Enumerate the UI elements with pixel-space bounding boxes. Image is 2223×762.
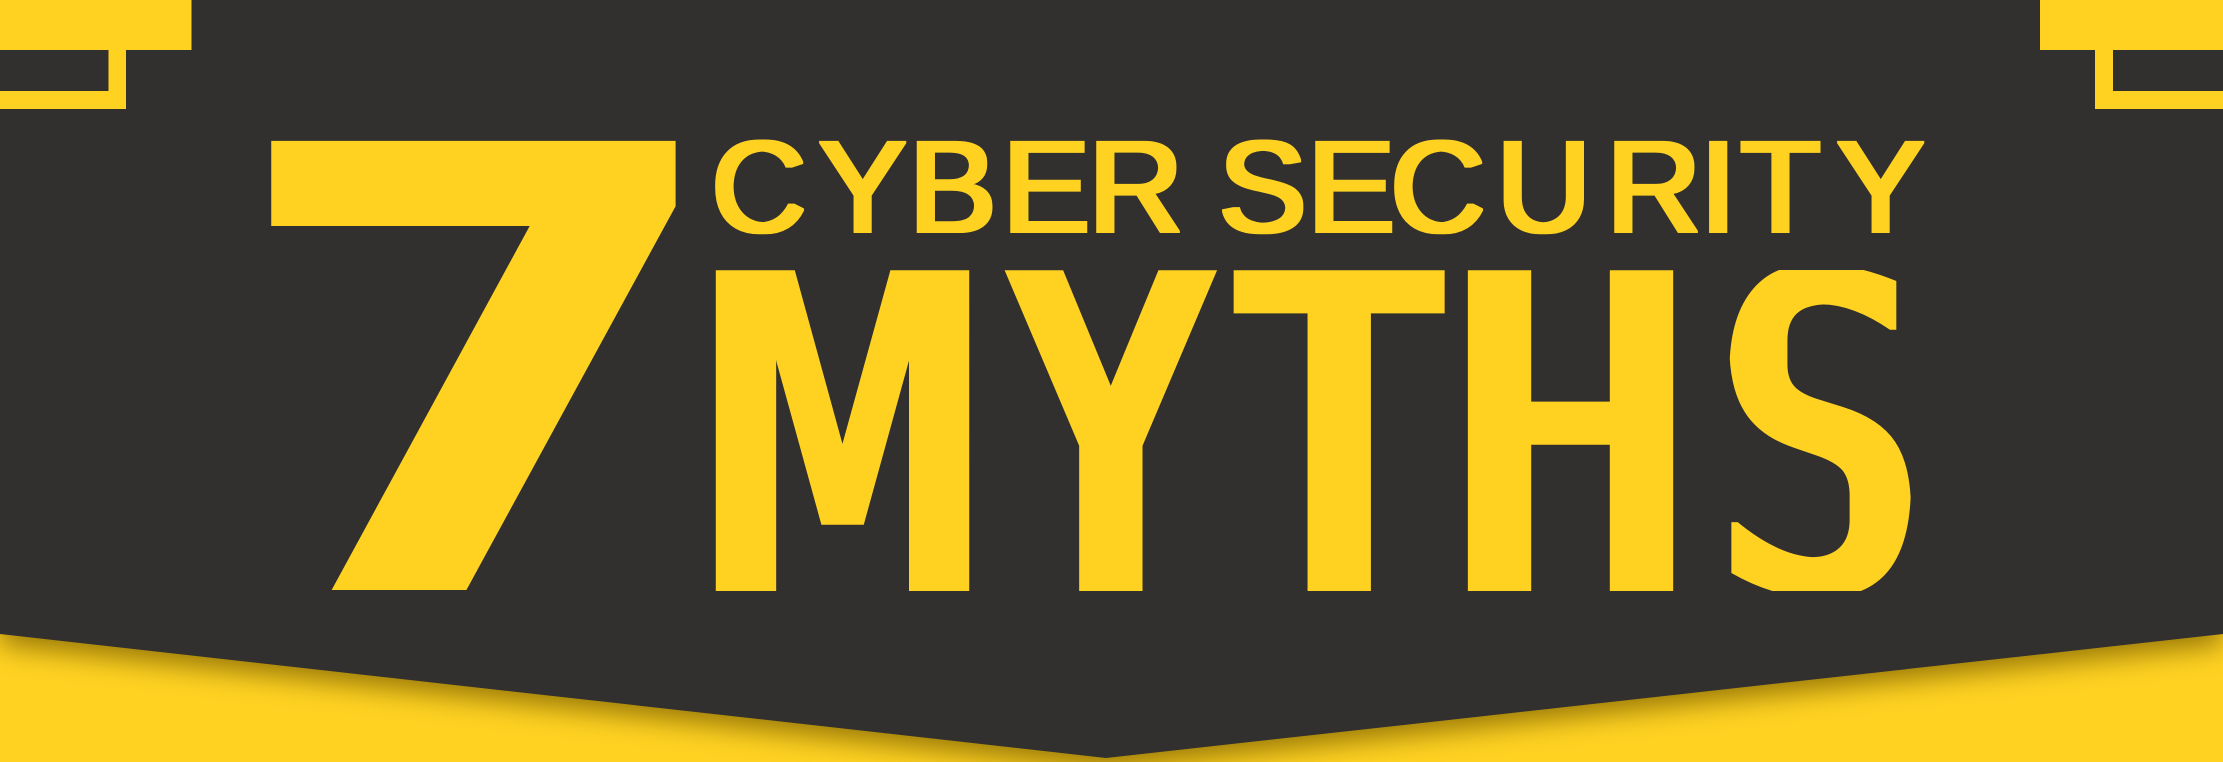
top-right corner bracket [2040,0,2223,109]
heading: myths: MYTHS [691,164,1930,715]
top-left corner bracket [0,0,192,109]
yellow lower band [0,600,2223,762]
big numeral 7: 7 [222,19,734,736]
heading: cyber security: CYBER SECURITY [712,113,1924,260]
